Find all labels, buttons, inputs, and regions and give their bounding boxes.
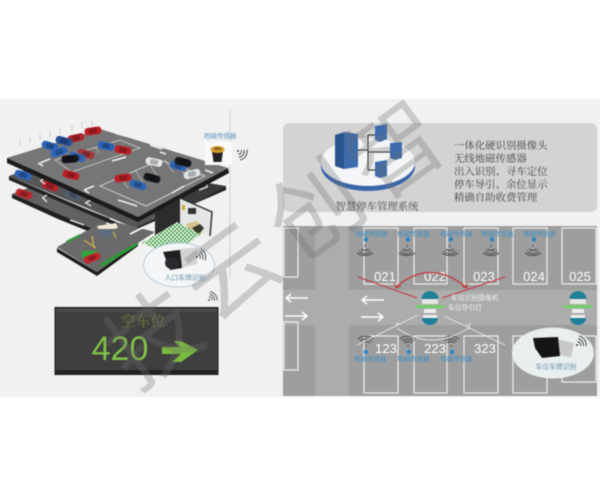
icon: wifi signal bbox=[234, 145, 249, 161]
icon: sensor bbox=[205, 142, 232, 165]
icon: main server bbox=[335, 132, 358, 169]
camera label: 入口车牌识别 bbox=[165, 273, 206, 282]
bay numbers: 323 bbox=[474, 341, 496, 356]
lower sensors: 地磁传感器 bbox=[397, 354, 430, 363]
watermark: 云 bbox=[165, 204, 299, 340]
feature list: 停车导引、余位显示 bbox=[454, 178, 548, 191]
entrance ramp and gate bbox=[57, 223, 155, 276]
bay numbers: 123 bbox=[375, 341, 397, 356]
bay numbers: 024 bbox=[523, 269, 545, 284]
upper sensors: 地磁传感器 bbox=[523, 229, 556, 238]
divider line bbox=[230, 110, 231, 278]
upper sensors: 地磁传感器 bbox=[355, 229, 388, 238]
illustration: multi-level parking garage bbox=[7, 121, 229, 276]
callout label: 车位车牌识别 bbox=[536, 362, 577, 371]
icon: camera bbox=[163, 247, 198, 270]
green hatched floor bbox=[142, 222, 200, 250]
watermark: 创 bbox=[250, 144, 384, 280]
callout: geomagnetic sensor bbox=[204, 131, 249, 165]
second deck bbox=[9, 168, 226, 232]
cars top deck bbox=[41, 126, 201, 191]
icon: small servers bbox=[375, 124, 402, 178]
guidance sign bbox=[55, 308, 218, 374]
bay numbers: 025 bbox=[569, 269, 591, 284]
top deck bbox=[7, 121, 229, 222]
sensor label: 地磁传感器 bbox=[204, 131, 237, 140]
camera labels: 车位导引灯 bbox=[448, 303, 482, 312]
watermark bbox=[87, 84, 464, 408]
third deck bbox=[12, 188, 110, 236]
guidance domes bbox=[416, 291, 592, 325]
watermark: 智 bbox=[330, 84, 464, 220]
bay outlines bbox=[284, 228, 596, 393]
network diagram bbox=[321, 124, 415, 191]
lower sensors bbox=[354, 336, 473, 363]
entry room bbox=[155, 198, 212, 236]
red guidance lines bbox=[358, 272, 505, 298]
background band bbox=[0, 99, 600, 397]
bay numbers: 223 bbox=[424, 341, 446, 356]
callout: bay plate recognition bbox=[512, 328, 594, 378]
system name: 智慧停车管理系统 bbox=[335, 200, 419, 213]
lower sensors: 地磁传感器 bbox=[354, 354, 387, 363]
feature list bbox=[454, 139, 548, 204]
feature list: 一体化硬识别摄像头 bbox=[454, 139, 548, 152]
icon: camera bbox=[533, 337, 574, 358]
white sight lines bbox=[357, 315, 505, 345]
bay numbers: 022 bbox=[424, 269, 446, 284]
lower sensors: 地磁传感器 bbox=[440, 354, 473, 363]
watermark: 技 bbox=[87, 272, 221, 408]
icon: wifi signal bbox=[194, 248, 207, 263]
icon: green arrow bbox=[162, 341, 198, 362]
icon: wifi signal bbox=[573, 335, 588, 351]
upper sensors: 地磁传感器 bbox=[440, 229, 473, 238]
panel: parking floor plan bbox=[283, 226, 597, 396]
feature list: 无线地磁传感器 bbox=[454, 152, 527, 165]
camera labels bbox=[448, 293, 499, 312]
feature list: 出入识别、寻车定位 bbox=[454, 165, 548, 178]
feature list: 精确自助收费管理 bbox=[454, 191, 538, 204]
cars lower decks bbox=[14, 169, 91, 225]
sign number: 420 bbox=[92, 330, 148, 368]
sign heading: 空车位 bbox=[120, 312, 166, 330]
bay numbers bbox=[374, 269, 591, 356]
darker bay zones bbox=[283, 226, 597, 396]
bay numbers: 023 bbox=[473, 269, 495, 284]
upper sensors bbox=[355, 229, 556, 255]
icon: wifi signal by sign bbox=[205, 290, 219, 305]
upper sensors: 地磁传感器 bbox=[481, 229, 514, 238]
upper sensors: 地磁传感器 bbox=[397, 229, 430, 238]
panel: management system bbox=[283, 123, 597, 213]
callout: entrance plate recognition bbox=[144, 243, 214, 287]
lane arrows bbox=[285, 294, 384, 321]
bay numbers: 021 bbox=[374, 269, 396, 284]
camera labels: 车位识别摄像机 bbox=[451, 293, 499, 302]
